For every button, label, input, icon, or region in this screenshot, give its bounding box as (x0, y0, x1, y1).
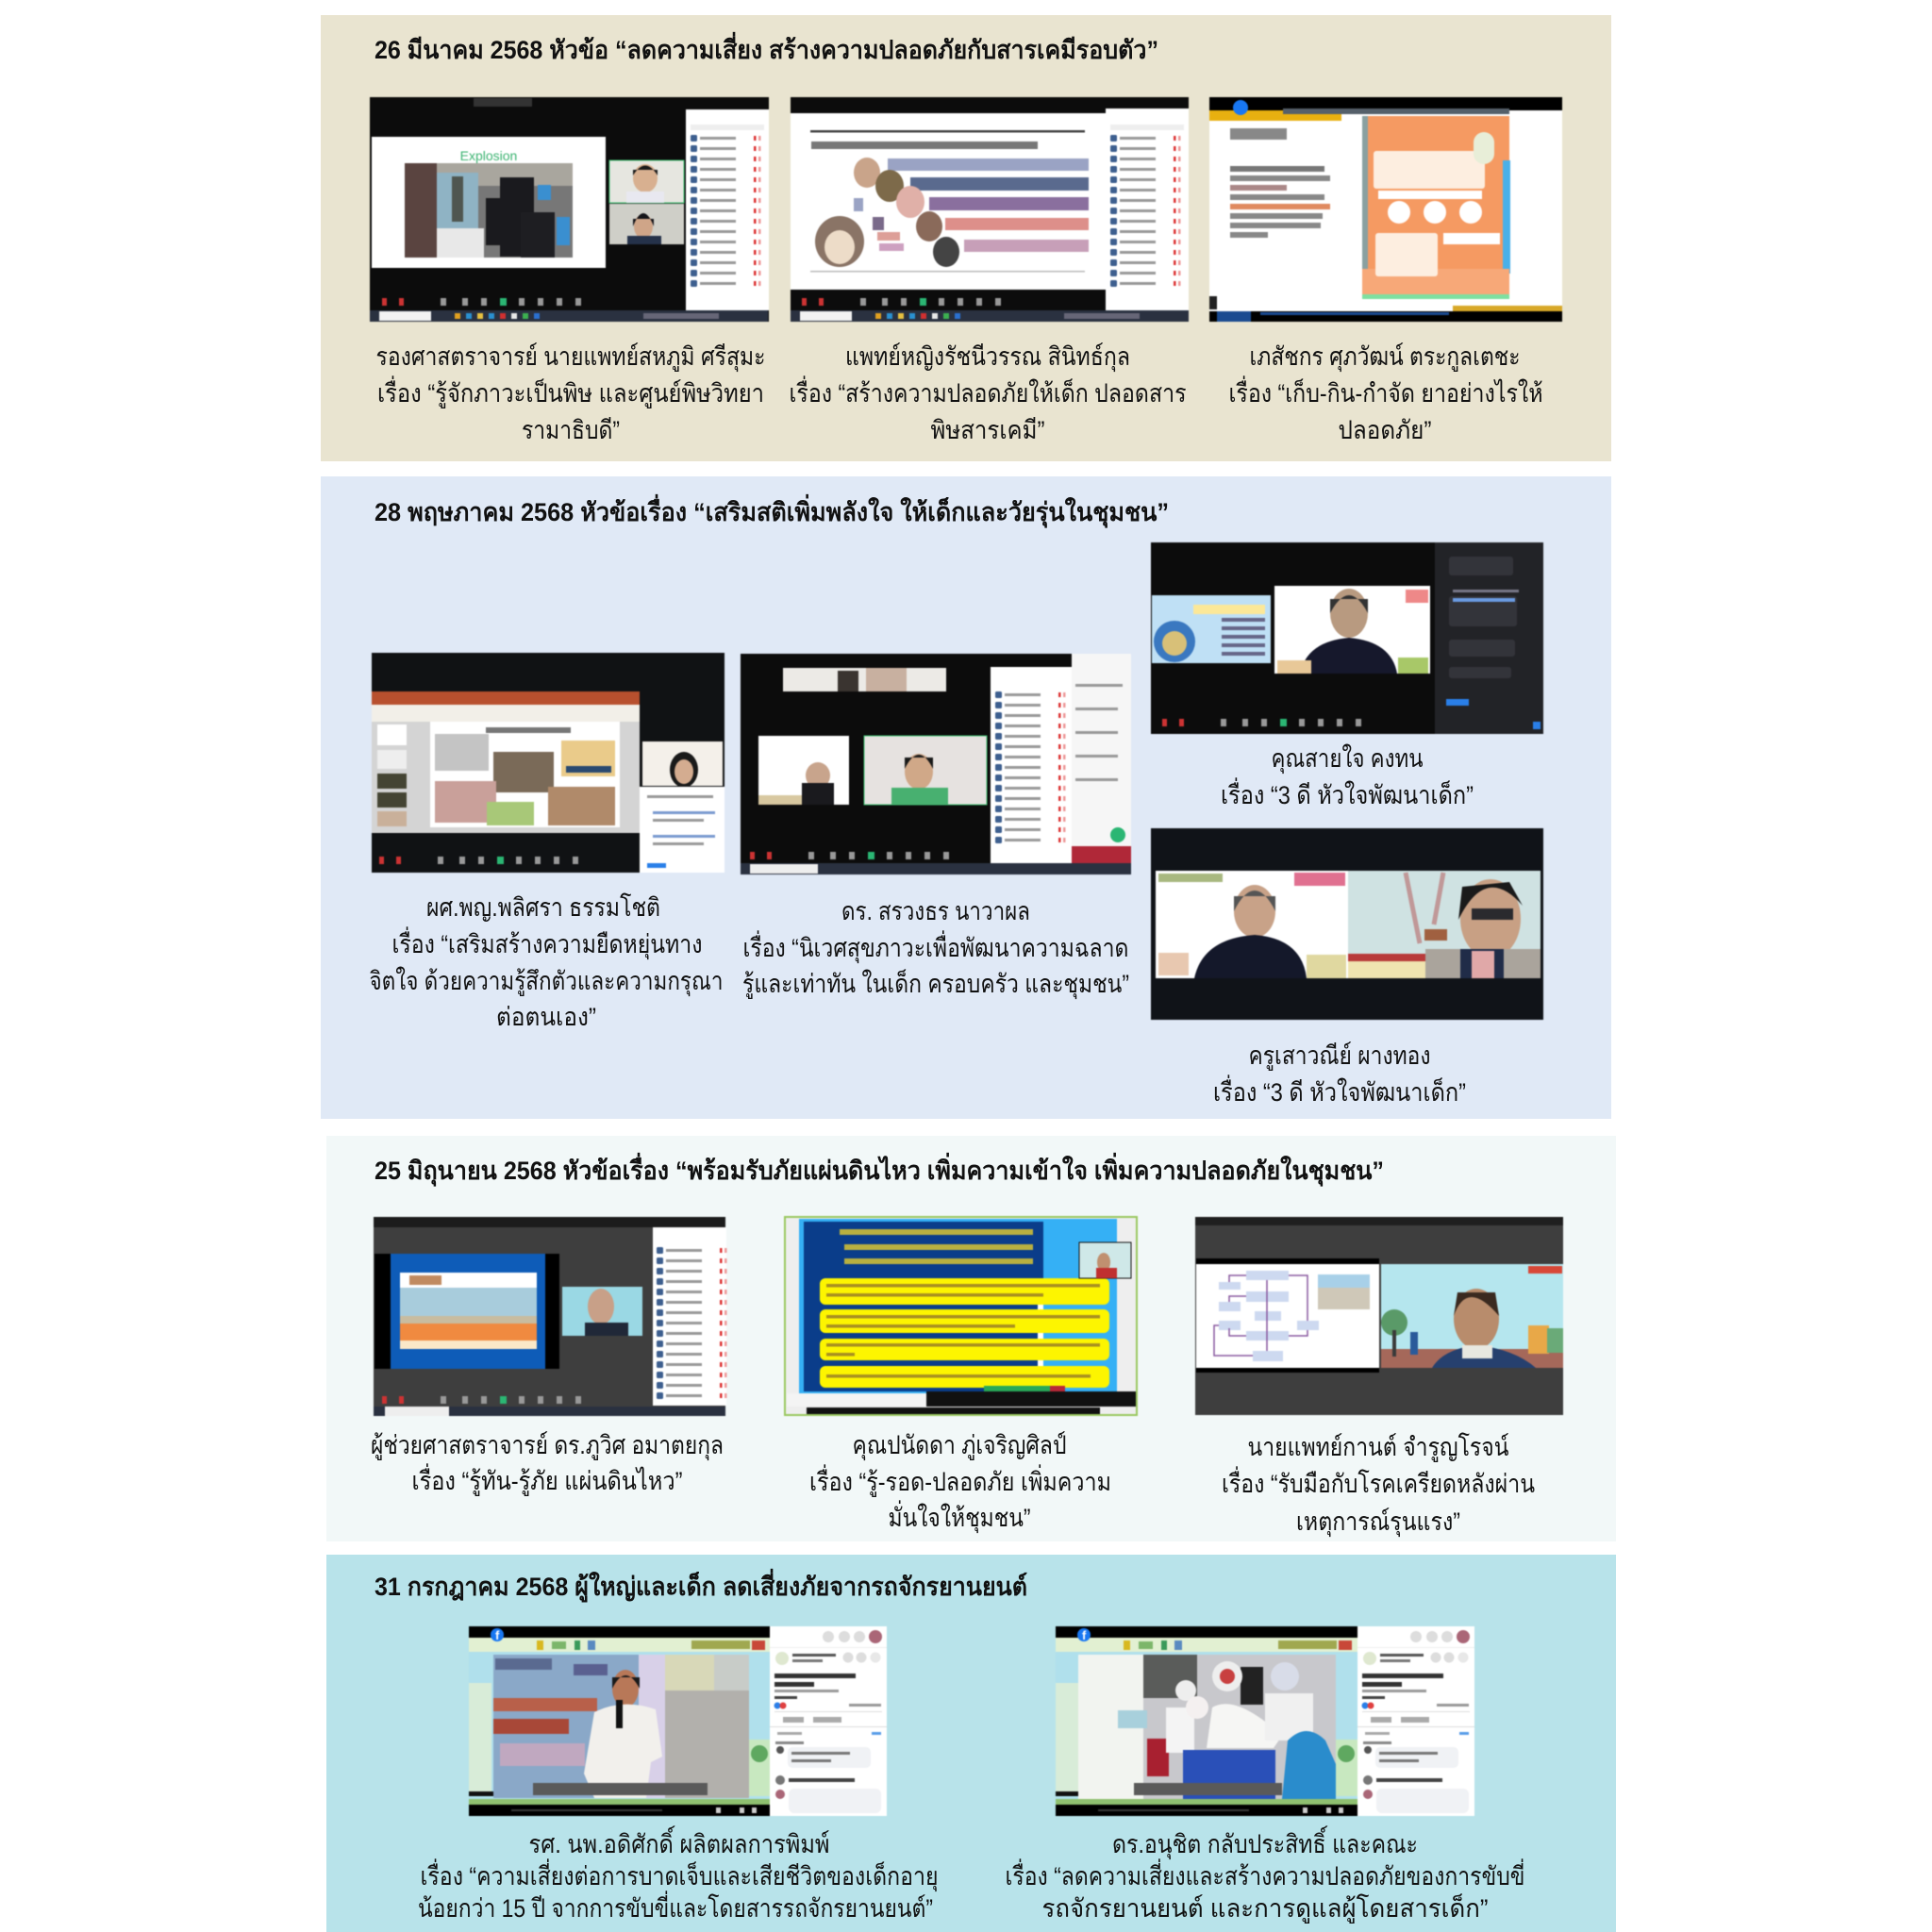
screenshot: child chemical safety slide (791, 97, 1189, 322)
caption: col 1: ต่อตนเอง” (496, 1003, 596, 1031)
panel: 28 May session (321, 476, 1611, 1119)
caption: col 2: คุณปนัดดา ภู่เจริญศิลป์ (853, 1430, 1066, 1461)
caption: speaker 1: รองศาสตราจารย์ นายแพทย์สหภูมิ ศรีสุมะ (375, 341, 766, 373)
caption: col 1: จิตใจ ด้วยความรู้สึกตัวและความกรุณา (370, 966, 723, 997)
panel: 31 July session (326, 1555, 1616, 1932)
caption: col 3: นายแพทย์กานต์ จำรูญโรจน์ (1247, 1432, 1509, 1462)
caption: col 1 (418, 1825, 938, 1923)
caption: col 2 (809, 1430, 1111, 1534)
caption: col 1: ผศ.พญ.พลิศรา ธรรมโชติ (426, 893, 660, 922)
caption: col 2: มั่นใจให้ชุมชน” (889, 1500, 1030, 1534)
caption: speaker 1: รามาธิบดี” (522, 416, 620, 444)
screenshot: community disaster slide (785, 1217, 1137, 1415)
screenshot: facebook live speaker (469, 1626, 887, 1816)
caption: col 2: ดร. สรวงธร นาวาผล (841, 897, 1030, 925)
caption: col 2 (1006, 1825, 1524, 1924)
caption: speaker 3 (1228, 341, 1543, 444)
caption: col 1: เรื่อง “เสริมสร้างความยืดหยุ่นทาง (392, 926, 702, 960)
caption: col 1: เรื่อง “ความเสี่ยงต่อการบาดเจ็บและเสียชีวิตของเด็กอายุ (421, 1858, 938, 1892)
caption: col 2: รถจักรยานยนต์ และการดูแลผู้โดยสารเด็ก” (1041, 1891, 1489, 1924)
caption: col 2: เรื่อง “นิเวศสุขภาวะเพื่อพัฒนาความฉลาด (743, 930, 1128, 964)
caption: speaker 1: เรื่อง “รู้จักภาวะเป็นพิษ และศูนย์พิษวิทยา (377, 375, 764, 408)
caption: col 1: ผู้ช่วยศาสตราจารย์ ดร.ภูวิศ อมาตยกุล (371, 1430, 724, 1461)
caption: speaker 2: เรื่อง “สร้างความปลอดภัยให้เด็ก ปลอดสาร (789, 375, 1187, 408)
caption: bottom right (1213, 1041, 1466, 1107)
caption: col 3: เหตุการณ์รุนแรง” (1296, 1507, 1460, 1538)
screenshot: two speakers (1151, 828, 1543, 1020)
caption: speaker 1 (375, 341, 766, 444)
screenshot: speaker with chat (1151, 542, 1543, 734)
caption: col 1 (371, 1430, 724, 1496)
panel: 25 June session (326, 1136, 1616, 1541)
caption: speaker 3: ปลอดภัย” (1338, 416, 1432, 444)
caption: speaker 2 (789, 341, 1187, 444)
caption: speaker 3: เภสัชกร ศุภวัฒน์ ตระกูลเตชะ (1249, 341, 1521, 373)
screenshot: explosion slide zoom meeting (370, 97, 769, 322)
caption: top right (1221, 743, 1474, 809)
caption: col 1: รศ. นพ.อดิศักดิ์ ผลิตผลการพิมพ์ (528, 1825, 830, 1858)
panel: 26 March session (321, 15, 1611, 461)
heading: 28 May: 28 พฤษภาคม 2568 หัวข้อเรื่อง “เสริมสติเพิ่มพลังใจ ให้เด็กและวัยรุ่นในชุมชน” (375, 493, 1169, 528)
caption: col 2: รู้และเท่าทัน ในเด็ก ครอบครัว และชุมชน” (742, 967, 1129, 1000)
caption: col 1: เรื่อง “รู้ทัน-รู้ภัย แผ่นดินไหว” (411, 1463, 683, 1496)
caption: bottom right: ครูเสาวณีย์ ผางทอง (1249, 1041, 1430, 1071)
caption: top right: คุณสายใจ คงทน (1272, 743, 1423, 774)
caption: col 2: เรื่อง “ลดความเสี่ยงและสร้างความปลอดภัยของการขับขี่ (1006, 1858, 1524, 1890)
caption: col 2 (742, 897, 1129, 1000)
screenshot: powerpoint zoom (372, 653, 724, 873)
caption: col 3: เรื่อง “รับมือกับโรคเครียดหลังผ่าน (1222, 1466, 1535, 1498)
caption: col 2: เรื่อง “รู้-รอด-ปลอดภัย เพิ่มความ (809, 1464, 1111, 1497)
screenshot: zoom panelists (741, 654, 1131, 874)
caption: bottom right: เรื่อง “3 ดี หัวใจพัฒนาเด็ก” (1213, 1074, 1466, 1107)
caption: speaker 3: เรื่อง “เก็บ-กิน-กำจัด ยาอย่างไรให้ (1228, 375, 1543, 408)
screenshot: medicine poster video (1209, 97, 1562, 322)
caption: top right: เรื่อง “3 ดี หัวใจพัฒนาเด็ก” (1221, 777, 1474, 809)
caption: col 1 (370, 893, 723, 1031)
caption: speaker 2: แพทย์หญิงรัชนีวรรณ สินิทธ์กุล (845, 341, 1130, 373)
heading: 26 March: 26 มีนาคม 2568 หัวข้อ “ลดความเสี่ยง สร้างความปลอดภัยกับสารเคมีรอบตัว” (375, 31, 1158, 64)
screenshot: stress flowchart (1195, 1217, 1563, 1415)
heading: 31 July: 31 กรกฎาคม 2568 ผู้ใหญ่และเด็ก ลดเสี่ยงภัยจากรถจักรยานยนต์ (375, 1568, 1027, 1603)
caption: col 3 (1222, 1432, 1535, 1538)
screenshot: explosion slide zoom meeting: Explosion (460, 148, 517, 163)
screenshot: plate boundaries (374, 1217, 726, 1416)
caption: col 1: น้อยกว่า 15 ปี จากการขับขี่และโดยสารรถจักรยานยนต์” (418, 1890, 933, 1923)
screenshot: facebook live motorcycle (1056, 1626, 1474, 1816)
caption: col 2: ดร.อนุชิต กลับประสิทธิ์ และคณะ (1112, 1825, 1418, 1860)
caption: speaker 2: พิษสารเคมี” (930, 416, 1045, 444)
heading: 25 June: 25 มิถุนายน 2568 หัวข้อเรื่อง “พร้อมรับภัยแผ่นดินไหว เพิ่มความเข้าใจ เพิ่มความปลอดภัยในชุมชน” (375, 1152, 1384, 1187)
